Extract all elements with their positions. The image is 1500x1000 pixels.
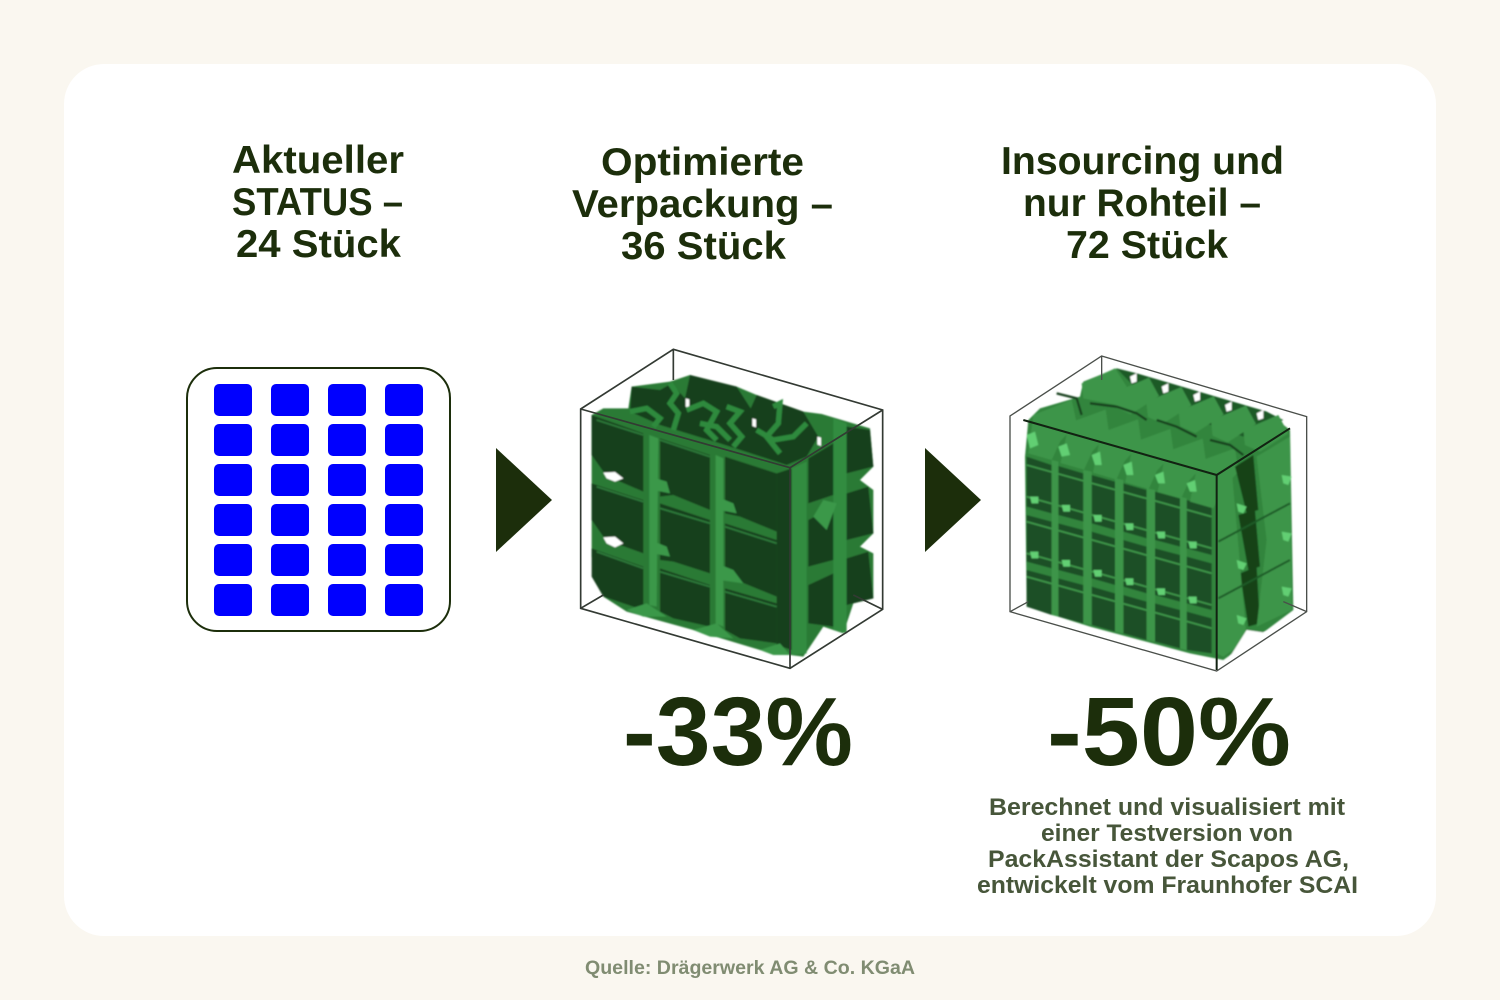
stat: minus 33 percent: -33% [623, 677, 853, 786]
heading: current status [232, 139, 404, 266]
heading: current status: 24 Stück [236, 223, 401, 266]
heading: optimised packaging: Optimierte [601, 141, 804, 184]
heading: optimised packaging: Verpackung – [572, 183, 833, 226]
note: calculation method: einer Testversion von [1041, 820, 1293, 847]
heading: current status: Aktueller [232, 139, 404, 182]
heading: current status: STATUS – [232, 181, 403, 224]
image: 72 parts packed in box [1010, 356, 1307, 671]
heading: insourcing: nur Rohteil – [1023, 182, 1261, 225]
heading: optimised packaging: 36 Stück [621, 225, 786, 268]
image: 36 parts packed in box [581, 349, 883, 668]
note: calculation method [977, 794, 1358, 899]
note: calculation method: Berechnet und visualisiert mit [989, 794, 1345, 821]
arrow: first [496, 448, 552, 552]
icon: crate with 24 blue parts [187, 368, 450, 631]
source line: Quelle: Drägerwerk AG & Co. KGaA [585, 958, 915, 979]
heading: insourcing: 72 Stück [1066, 224, 1228, 267]
heading: insourcing [1001, 140, 1284, 267]
note: calculation method: entwickelt vom Fraunhofer SCAI [977, 872, 1358, 899]
stat: minus 50 percent: -50% [1047, 677, 1291, 786]
panel: white card [64, 64, 1436, 936]
arrow: second [925, 448, 981, 552]
heading: optimised packaging [572, 141, 833, 268]
heading: insourcing: Insourcing und [1001, 140, 1284, 183]
note: calculation method: PackAssistant der Scapos AG, [988, 846, 1349, 873]
